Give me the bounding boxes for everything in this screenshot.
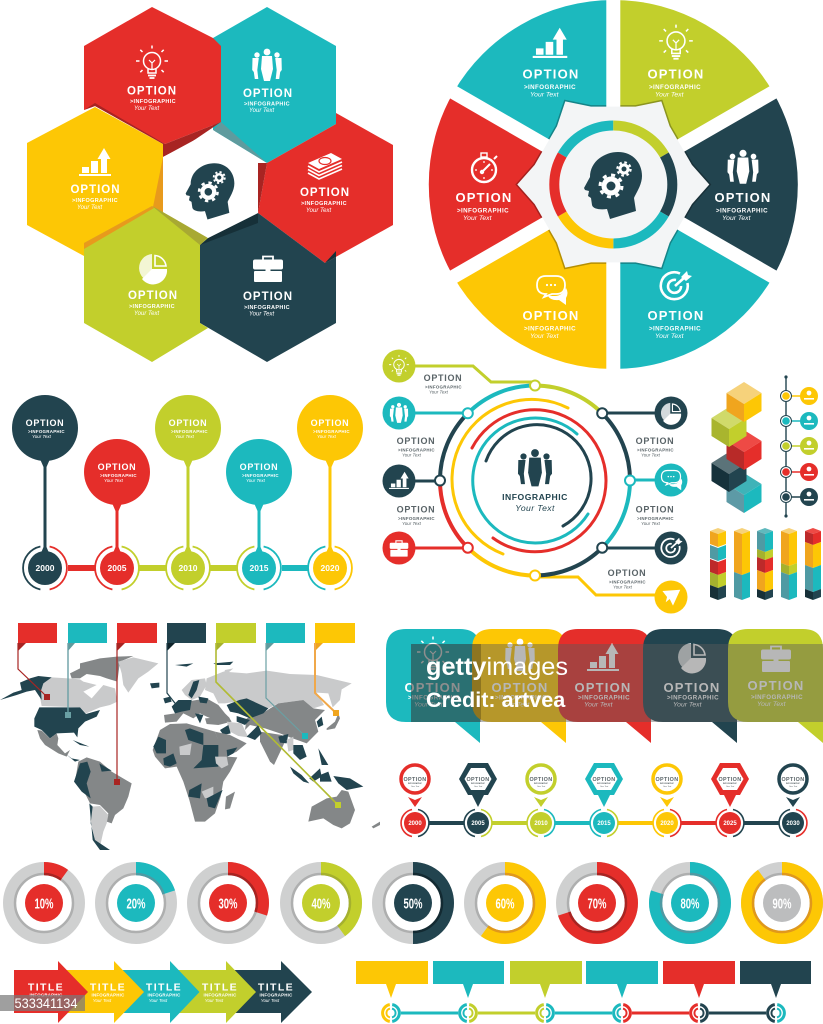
arrow: yellow: Your Text [93, 998, 112, 1003]
panel: percentage donuts [10, 868, 816, 938]
balloon 2000: Your Text [32, 434, 52, 439]
icon node: briefcase [382, 532, 416, 564]
outer ring [440, 385, 630, 576]
hexagon: yellow [27, 107, 163, 256]
label: navy hexagon: Your Text [249, 312, 274, 318]
balloon 2015: Your Text [246, 478, 266, 483]
item: navy [780, 488, 818, 506]
pin 2025 [711, 763, 749, 837]
icon: stopwatch [472, 153, 497, 182]
icon: head with gears [186, 163, 234, 220]
balloon 2005: 2005 [108, 563, 127, 573]
pin 2030: INFOGRAPHIC [786, 782, 801, 785]
arrow: teal: Your Text [149, 998, 168, 1003]
donut 30% [194, 868, 262, 938]
pin 2000: Your Text [411, 785, 420, 788]
label: lime hexagon [128, 290, 178, 317]
hexagon: teal [213, 7, 336, 163]
label: teal top [522, 66, 580, 98]
donut 70% [562, 868, 632, 938]
balloon 2010: Your Text [175, 434, 195, 439]
bubble: lime: Your Text [757, 701, 787, 708]
balloon 2020: >INFOGRAPHIC [313, 429, 350, 434]
donut 70%: 70% [588, 896, 606, 912]
label: option 2 [397, 436, 435, 458]
balloon 2015: 2015 [250, 563, 269, 573]
label: option 5 [636, 504, 674, 526]
donut 10%: 10% [34, 896, 54, 912]
pin 2000: OPTION [403, 777, 427, 783]
balloon 2010 [155, 395, 221, 590]
centre text: INFOGRAPHIC [502, 492, 568, 502]
label: option 3: Your Text [402, 521, 422, 526]
connector bars [68, 565, 308, 571]
pin 2030: Your Text [789, 785, 798, 788]
icon: bulb [136, 46, 168, 78]
icon node: chart [382, 464, 416, 498]
map: americas [0, 656, 159, 850]
pin 2030: 2030 [786, 821, 800, 827]
bubble: teal: OPTION [404, 680, 462, 695]
item: lime [780, 437, 818, 455]
label: teal top: Your Text [530, 92, 560, 98]
gear centre [517, 101, 709, 268]
label: navy right: >INFOGRAPHIC [716, 208, 768, 214]
label: red hexagon: Your Text [134, 106, 159, 112]
balloon 2020 [297, 395, 363, 590]
label: option 5: Your Text [641, 521, 661, 526]
label: teal hexagon: >INFOGRAPHIC [244, 102, 290, 108]
label: option 1: Your Text [429, 390, 449, 394]
arrow: red [14, 961, 88, 1023]
panel: title arrows [14, 961, 312, 1023]
bubble: yellow: OPTION [491, 680, 549, 695]
label: yellow bottom: Your Text [530, 333, 560, 340]
arrow: lime [170, 961, 256, 1023]
label: lime top: >INFOGRAPHIC [649, 84, 701, 91]
label: navy hexagon [243, 291, 293, 318]
panel: gear wheel [429, 0, 798, 374]
bubble: navy: OPTION [663, 680, 721, 695]
label: yellow hexagon [70, 184, 121, 211]
icon: chat [537, 276, 568, 305]
arrow: navy: Your Text [261, 998, 280, 1003]
arrow: lime: Your Text [205, 998, 224, 1003]
wheel sectors [429, 0, 798, 369]
label: teal hexagon [243, 88, 293, 114]
bubble: navy [643, 629, 737, 743]
label: yellow hexagon: Your Text [77, 205, 102, 211]
label: option 6: Your Text [613, 584, 633, 590]
balloon 2015 [226, 439, 292, 590]
icon: briefcase [253, 256, 283, 282]
balloon 2015: OPTION [240, 462, 278, 472]
pin 2015: OPTION [592, 777, 616, 783]
donut 10% [10, 868, 78, 938]
centre text: Your Text [515, 503, 555, 513]
label: lime top [647, 66, 705, 98]
hexagon: red right [258, 113, 393, 263]
icon: chart [79, 148, 111, 176]
item: yellow [780, 387, 818, 405]
icon: chart [533, 28, 567, 58]
folded shadows [84, 103, 336, 263]
panel: stacked cubes [712, 382, 762, 513]
balloon 2020: 2020 [321, 563, 340, 573]
label: navy right [714, 190, 772, 222]
donut 40%: 40% [312, 896, 330, 912]
label: option 4: >INFOGRAPHIC [637, 448, 674, 452]
label: red left: Your Text [463, 215, 493, 222]
arrow: lime: INFOGRAPHIC [204, 992, 237, 998]
panel: vertical mini timeline [780, 375, 818, 518]
map: eurasia africa oceania [153, 662, 380, 828]
coloured hub ring [554, 126, 672, 244]
label: red left: >INFOGRAPHIC [457, 208, 509, 214]
pin 2005: INFOGRAPHIC [471, 782, 486, 785]
label: red right hexagon: OPTION [300, 187, 350, 199]
pin 2020: Your Text [663, 785, 672, 788]
hexagon: navy [200, 213, 336, 362]
label: teal top: >INFOGRAPHIC [524, 84, 576, 91]
balloon 2005: OPTION [98, 462, 136, 472]
callout: lime [510, 961, 582, 1023]
arrow: navy [230, 961, 312, 1023]
balloon 2000: OPTION [26, 418, 64, 428]
balloon 2005 [84, 439, 150, 590]
cube: navy [712, 452, 746, 492]
pin 2015: Your Text [600, 785, 609, 788]
callout: teal 2 [586, 961, 658, 1023]
label: option 2: >INFOGRAPHIC [398, 448, 435, 452]
watermark: getty images [411, 644, 823, 722]
pin 2015: 2015 [597, 821, 611, 827]
label: navy hexagon: >INFOGRAPHIC [244, 305, 290, 311]
timeline line [391, 1012, 776, 1014]
label: option 5: OPTION [636, 504, 674, 514]
bubble: lime [728, 629, 823, 743]
inner arcs [452, 399, 606, 554]
balloon 2000 [12, 395, 78, 590]
cube: yellow [726, 382, 762, 422]
label: option 6: >INFOGRAPHIC [609, 580, 646, 584]
label: navy right: OPTION [714, 190, 772, 205]
label: red hexagon: >INFOGRAPHIC [130, 99, 176, 105]
bubble: lime: OPTION [747, 678, 805, 693]
arrow: red: TITLE [28, 982, 64, 994]
label: lime top: OPTION [647, 66, 705, 82]
label: option 1: OPTION [424, 373, 462, 383]
flag: navy [167, 623, 206, 707]
watermark: getty images: gettyimages [426, 653, 568, 681]
arrow: lime: TITLE [202, 982, 238, 994]
arrow: yellow: TITLE [90, 982, 126, 994]
flag: teal 1 [65, 623, 107, 718]
bubble: red: Your Text [584, 702, 614, 708]
icon: pie [139, 254, 167, 284]
centre text [502, 492, 568, 513]
label: red hexagon: OPTION [127, 86, 177, 98]
column 1 [710, 528, 726, 600]
pin 2020 [653, 765, 681, 837]
label: teal hexagon: OPTION [243, 88, 293, 100]
arrow: yellow [60, 961, 144, 1023]
pin 2000: 2000 [408, 821, 422, 827]
arrow: teal: INFOGRAPHIC [148, 992, 181, 998]
label: red right hexagon [300, 187, 350, 214]
bubble: lime: >INFOGRAPHIC [751, 694, 803, 701]
hexagon: red top [84, 7, 221, 144]
label: lime hexagon: Your Text [134, 311, 159, 317]
donut 30%: 30% [218, 896, 238, 912]
label: teal bottom: Your Text [655, 333, 685, 340]
donut 50% [378, 868, 448, 938]
icon node: bulb [382, 350, 416, 382]
icon node: chat [654, 464, 688, 496]
label: lime top: Your Text [655, 92, 685, 98]
label: yellow bottom: OPTION [522, 308, 580, 323]
arrow: yellow: INFOGRAPHIC [92, 992, 125, 998]
icon node: target [654, 532, 688, 564]
pin 2005: OPTION [466, 777, 490, 783]
connector lines [415, 366, 655, 595]
gear shadow [517, 101, 709, 268]
label: option 4: OPTION [636, 436, 674, 446]
label: teal top: OPTION [522, 66, 580, 82]
column 3 [757, 528, 773, 600]
ring nodes [435, 380, 635, 580]
icon: people centre [518, 449, 552, 486]
label: lime hexagon: OPTION [128, 290, 178, 302]
donut 40% [286, 868, 356, 938]
panel: hexagon cluster [27, 7, 393, 362]
balloon 2015: >INFOGRAPHIC [242, 473, 279, 478]
pin 2020: 2020 [660, 821, 674, 827]
column 2 [734, 528, 750, 600]
balloon 2010: >INFOGRAPHIC [171, 429, 208, 434]
panel: pin timeline [401, 763, 807, 837]
label: teal bottom: >INFOGRAPHIC [649, 326, 701, 332]
pin 2005 [459, 763, 497, 837]
label: option 5: >INFOGRAPHIC [637, 516, 674, 521]
cube: teal [726, 473, 762, 513]
watermark: getty images: Credit: artvea [426, 687, 566, 712]
panel: balloon timeline [12, 395, 363, 590]
callout: red [663, 961, 735, 1023]
donut 50%: 50% [404, 896, 422, 912]
label: option 6 [608, 568, 646, 590]
donut 60%: 60% [496, 896, 514, 912]
watermark: image id: 533341134 [14, 995, 78, 1011]
bubble: navy: Your Text [673, 702, 703, 708]
label: yellow hexagon: >INFOGRAPHIC [72, 198, 118, 204]
bubble: yellow: >INFOGRAPHIC [495, 694, 547, 702]
pin 2000: INFOGRAPHIC [408, 782, 423, 785]
column 4 [781, 528, 797, 600]
icon: head with gears [584, 152, 642, 219]
label: navy right: Your Text [722, 215, 752, 222]
label: yellow bottom [522, 308, 580, 340]
column 5 [805, 528, 821, 600]
label: option 3: >INFOGRAPHIC [398, 516, 435, 521]
bubble: navy: >INFOGRAPHIC [667, 694, 719, 702]
flag: red 2 [114, 623, 157, 785]
donut 90%: 90% [772, 896, 792, 912]
panel: world map with flags [0, 623, 380, 850]
pin 2025: INFOGRAPHIC [723, 782, 738, 785]
pin 2020: OPTION [655, 777, 679, 783]
balloon 2020: Your Text [317, 434, 337, 439]
callout: teal 1 [433, 961, 504, 1023]
pin 2010: Your Text [537, 785, 546, 788]
flag: lime [216, 623, 341, 808]
pin 2030: OPTION [781, 777, 805, 783]
label: red right hexagon: >INFOGRAPHIC [301, 201, 347, 207]
label: yellow hexagon: OPTION [70, 184, 121, 196]
callout: yellow [356, 961, 428, 1023]
hexagon: lime [84, 206, 208, 362]
label: red hexagon [127, 86, 177, 112]
label: option 1 [424, 373, 462, 394]
arrow: red: INFOGRAPHIC [30, 992, 63, 998]
bubble: red: OPTION [574, 680, 632, 695]
balloon 2000: >INFOGRAPHIC [28, 429, 65, 434]
donut 20%: 20% [126, 896, 146, 912]
item: red [780, 463, 818, 481]
donut 60% [470, 868, 540, 938]
icon: money [308, 153, 342, 179]
panel: circular network diagram [382, 350, 688, 614]
bubble: red: >INFOGRAPHIC [578, 694, 630, 702]
pin 2010: INFOGRAPHIC [534, 782, 549, 785]
donut 80%: 80% [680, 896, 700, 912]
icon node: pie [654, 396, 688, 430]
item: teal [780, 412, 818, 430]
donut 90% [748, 868, 816, 938]
flag: yellow [315, 623, 355, 716]
pin 2030 [779, 765, 807, 837]
balloon 2010: OPTION [169, 418, 207, 428]
balloon 2005: Your Text [104, 478, 124, 483]
white centre hexagon [163, 130, 258, 238]
label: teal hexagon: Your Text [249, 108, 274, 114]
label: option 3 [397, 504, 435, 526]
pin 2025: OPTION [718, 777, 742, 783]
label: option 1: >INFOGRAPHIC [425, 384, 462, 390]
label: option 3: OPTION [397, 504, 435, 514]
arrow: navy: INFOGRAPHIC [260, 992, 293, 998]
icon: people [727, 150, 759, 184]
label: option 4: Your Text [641, 452, 661, 458]
label: navy hexagon: OPTION [243, 291, 293, 303]
label: option 2: OPTION [397, 436, 435, 446]
label: red left: OPTION [455, 190, 513, 205]
label: option 4 [636, 436, 674, 458]
pin 2005: 2005 [471, 821, 485, 827]
icon: target [661, 271, 692, 299]
pin 2020: INFOGRAPHIC [660, 782, 675, 785]
bubble: yellow [472, 629, 566, 743]
label: red left [455, 190, 513, 222]
icon: bulb [659, 25, 693, 59]
arrow: navy: TITLE [258, 982, 294, 994]
donut 20% [102, 868, 170, 938]
label: option 2: Your Text [402, 452, 422, 458]
label: yellow bottom: >INFOGRAPHIC [524, 326, 576, 332]
cube: red [726, 430, 762, 470]
pin 2015 [585, 763, 623, 837]
flag: red 1 [18, 623, 57, 700]
panel: speech bubbles [386, 629, 823, 743]
icon: people [252, 49, 282, 81]
label: teal bottom: OPTION [647, 308, 705, 323]
icon node: plane [654, 580, 688, 614]
balloon 2000: 2000 [36, 563, 55, 573]
pin 2015: INFOGRAPHIC [597, 782, 612, 785]
arrow: teal: TITLE [146, 982, 182, 994]
pin 2025: 2025 [723, 821, 737, 827]
pin 2010 [527, 765, 555, 837]
bubble: teal [386, 629, 480, 743]
bubble: red [558, 629, 651, 743]
connecting line [415, 821, 793, 825]
icon node: people [382, 396, 416, 430]
panel: isometric columns [710, 528, 821, 600]
balloon 2005: >INFOGRAPHIC [100, 473, 137, 478]
balloon 2010: 2010 [179, 563, 198, 573]
panel: callout timeline [356, 961, 811, 1023]
pin 2010: OPTION [529, 777, 553, 783]
bubble: teal: >INFOGRAPHIC [408, 694, 460, 702]
cube: lime [712, 407, 746, 447]
bubble: teal: Your Text [414, 702, 444, 708]
bubble: yellow: Your Text [501, 702, 531, 708]
callout: navy [740, 961, 811, 1023]
pin 2005: Your Text [474, 785, 483, 788]
donut 80% [656, 868, 724, 938]
balloon 2020: OPTION [311, 418, 349, 428]
arrow: teal [115, 961, 200, 1023]
label: option 6: OPTION [608, 568, 646, 578]
flag: teal 2 [266, 623, 308, 739]
label: lime hexagon: >INFOGRAPHIC [129, 304, 175, 310]
label: red right hexagon: Your Text [306, 208, 331, 214]
pin 2000 [401, 765, 429, 837]
pin 2010: 2010 [534, 821, 548, 827]
pin 2025: Your Text [726, 785, 735, 788]
label: teal bottom [647, 308, 705, 340]
